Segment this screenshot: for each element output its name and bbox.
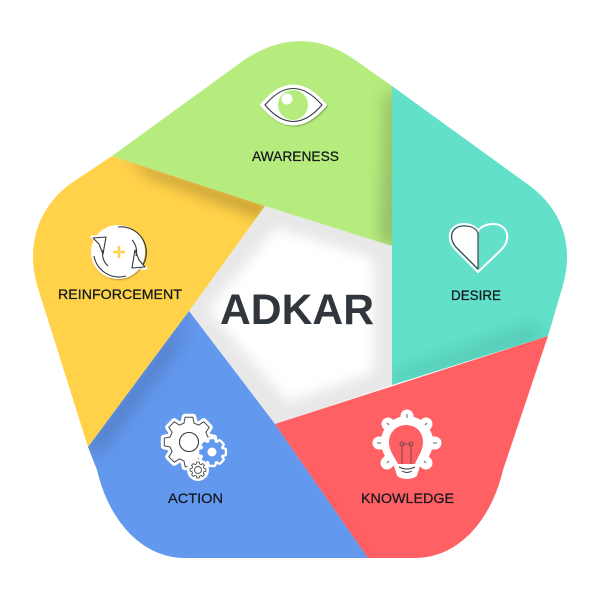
bulb lobes xyxy=(379,416,435,463)
icon: light bulb xyxy=(377,414,437,477)
desire shadow xyxy=(396,326,540,382)
reinforcement segment xyxy=(33,156,265,447)
label: awareness: AWARENESS xyxy=(252,148,339,164)
filament xyxy=(400,442,413,464)
centre background xyxy=(189,206,392,424)
label: reinforcement: REINFORCEMENT xyxy=(58,286,182,302)
bulb ticks xyxy=(377,414,437,463)
bulb base lines xyxy=(399,467,415,472)
panel: desire xyxy=(392,86,567,386)
icon: gears xyxy=(164,417,224,481)
panel: knowledge xyxy=(275,336,548,560)
small gear xyxy=(187,459,209,481)
knowledge shadow xyxy=(300,470,368,560)
awareness segment xyxy=(112,41,392,246)
blue gear xyxy=(200,440,224,464)
title: ADKAR xyxy=(220,286,374,334)
panel: awareness xyxy=(112,41,402,250)
label: knowledge: KNOWLEDGE xyxy=(361,490,454,506)
icon: eye xyxy=(261,86,326,124)
reinforcement shadow xyxy=(125,158,270,220)
knowledge segment xyxy=(275,336,548,558)
label: action: ACTION xyxy=(168,490,223,506)
centre highlight xyxy=(208,228,374,402)
desire segment xyxy=(392,86,567,385)
label: desire: DESIRE xyxy=(451,287,501,303)
panel: action xyxy=(85,311,368,558)
action shadow xyxy=(85,311,189,452)
icon: cycle xyxy=(91,225,146,279)
bulb ring xyxy=(381,416,433,468)
panel: reinforcement xyxy=(33,156,270,447)
icon: heart xyxy=(450,224,507,272)
awareness shadow xyxy=(373,86,392,246)
action segment xyxy=(88,311,368,558)
bulb glass xyxy=(389,425,423,464)
large gear xyxy=(164,417,214,467)
panel: centre xyxy=(189,206,392,424)
